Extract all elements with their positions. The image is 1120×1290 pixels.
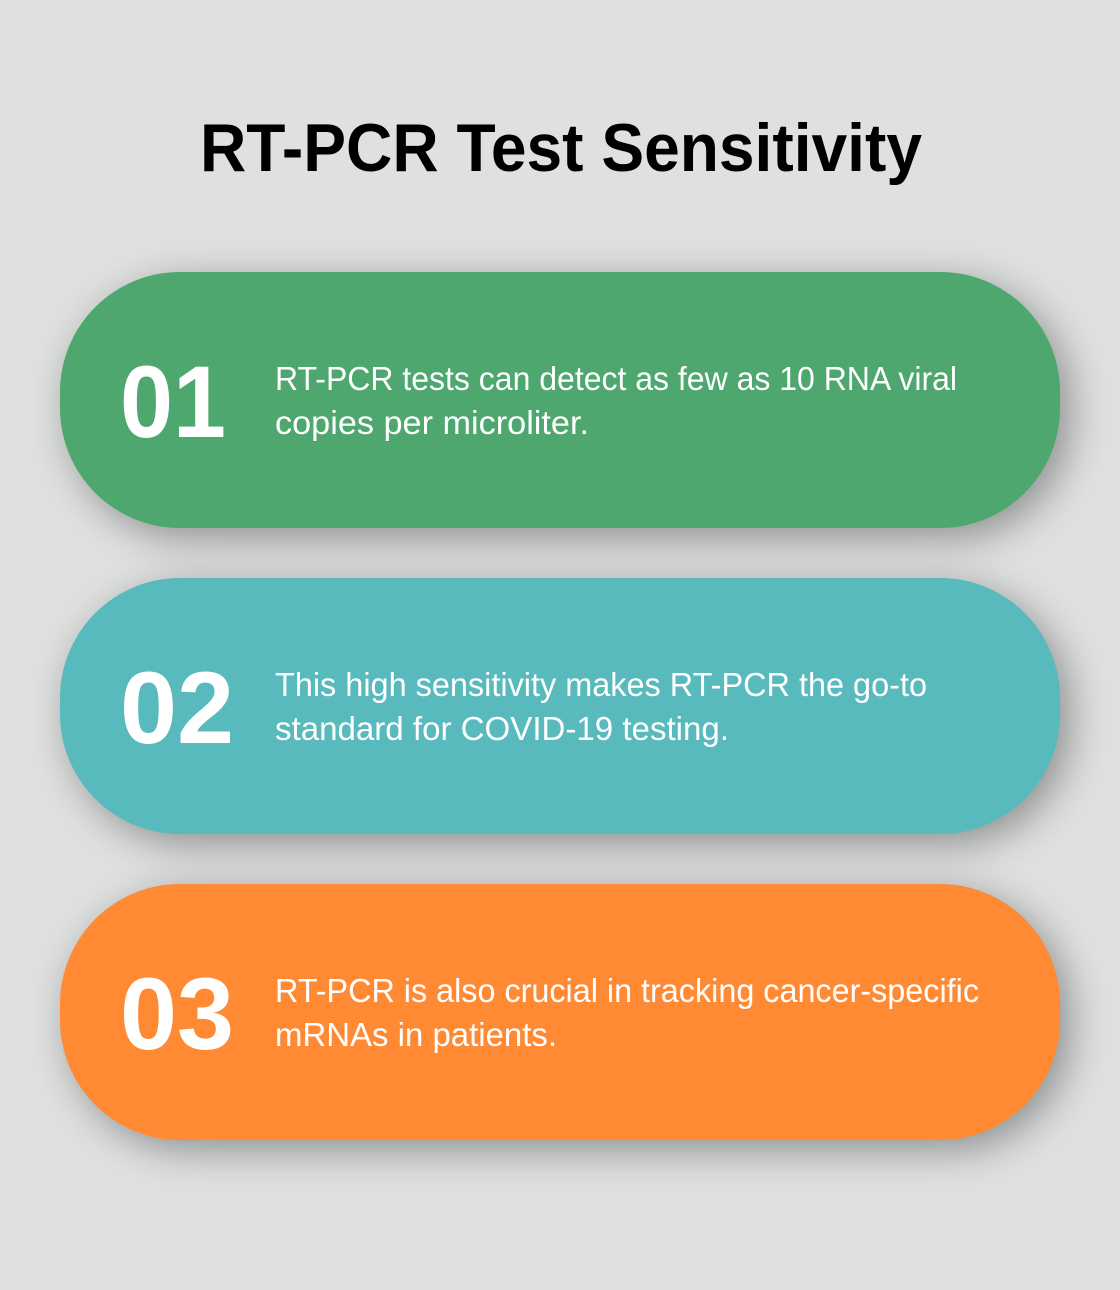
text: card 02: This high sensitivity makes RT-PCR the go-to	[275, 666, 927, 703]
number 03: 03	[120, 957, 234, 1071]
text: card 02: standard for COVID-19 testing.	[275, 710, 729, 747]
panel: teal card 02	[60, 578, 1060, 834]
number 01: 01	[120, 345, 226, 459]
number 02: 02	[120, 651, 234, 765]
title: RT-PCR Test Sensitivity	[200, 110, 922, 186]
text: card 01	[275, 360, 957, 441]
text: card 03	[275, 972, 979, 1053]
text: card 02	[275, 666, 927, 747]
panel: green card 01	[60, 272, 1060, 528]
text: card 01: RT-PCR tests can detect as few as 10 RNA viral	[275, 360, 957, 397]
text: card 03: mRNAs in patients.	[275, 1016, 557, 1053]
text: card 03: RT-PCR is also crucial in tracking cancer-specific	[275, 972, 979, 1009]
text: card 01: copies per microliter.	[275, 404, 589, 441]
panel: orange card 03	[60, 884, 1060, 1140]
